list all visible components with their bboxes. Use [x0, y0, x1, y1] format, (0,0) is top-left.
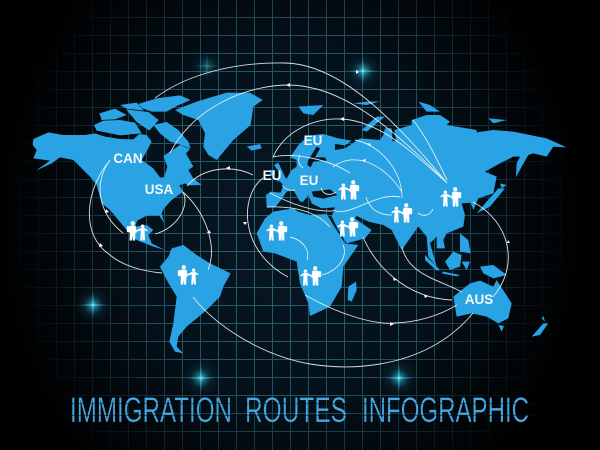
- southeast asian islands: [425, 233, 507, 278]
- title: [60, 391, 540, 430]
- New Zealand: [532, 316, 548, 337]
- north arctic islands: [298, 102, 507, 132]
- icon: family East Africa: [300, 266, 321, 285]
- Japan: [477, 183, 507, 213]
- glow stars: [73, 46, 419, 398]
- arctic islands: [94, 95, 191, 149]
- icon: family Middle East: [338, 217, 358, 236]
- label: EU north: EU: [304, 133, 322, 148]
- Madagascar: [348, 282, 357, 302]
- region labels: [113, 133, 493, 307]
- continent: Africa: [257, 208, 358, 316]
- label: EU central: EU: [300, 173, 318, 188]
- title: ROUTES: [245, 391, 347, 430]
- icon: family China: [440, 187, 461, 206]
- icon: family South America: [178, 265, 198, 284]
- continent: Australia: [453, 280, 512, 332]
- South America: [160, 245, 231, 353]
- Britain: [270, 163, 287, 182]
- icon: family India: [392, 203, 412, 222]
- world map: [33, 93, 567, 353]
- label: EU west: EU: [263, 168, 281, 183]
- Greenland: [175, 93, 263, 160]
- label: CAN: CAN: [113, 151, 143, 166]
- icon: family Mexico: [127, 221, 148, 240]
- label: USA: USA: [145, 182, 173, 197]
- migrant family icons: [127, 180, 461, 285]
- title: INFOGRAPHIC: [362, 391, 529, 430]
- Baltic gap: [307, 147, 327, 167]
- route arrowheads: [99, 70, 510, 326]
- icon: family West Africa: [266, 221, 287, 240]
- Iceland: [247, 144, 262, 151]
- continent: North America: [33, 132, 202, 250]
- title: IMMIGRATION: [70, 391, 232, 430]
- continent: Eurasia: [266, 115, 567, 267]
- label: AUS: AUS: [465, 292, 493, 307]
- migration routes: [89, 63, 508, 367]
- icon: family Central Asia: [338, 180, 359, 199]
- eurasia africa oceania: [257, 102, 567, 337]
- americas and greenland: [33, 93, 287, 353]
- Black Sea: [312, 189, 337, 199]
